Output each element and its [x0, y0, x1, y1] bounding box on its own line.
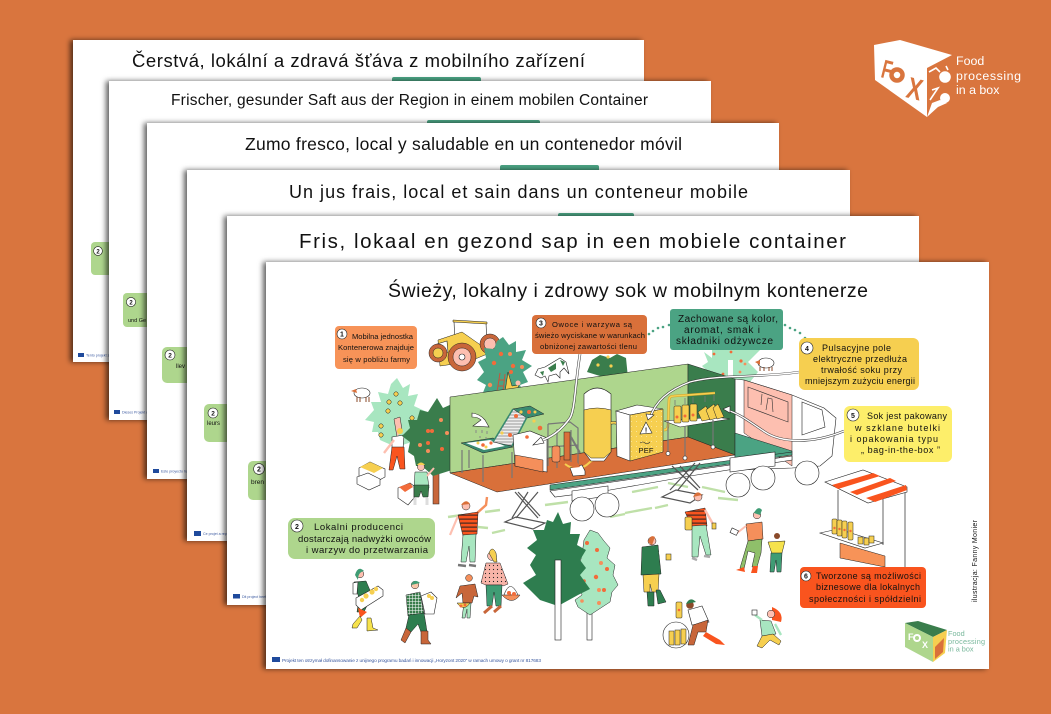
person: running woman [752, 607, 782, 648]
logo: Food processing in a box (bottom right) [905, 621, 985, 662]
illustrator credit: ilustracja: Fanny Monier [972, 519, 979, 602]
person: man with teal vest [641, 536, 671, 606]
icon: mint apple tree with picker [365, 378, 427, 470]
callout 4: Pulsacyjne pole [822, 343, 891, 353]
heading: German title: Frischer, gesunder Saft aus der Region in einem mobilen Container [171, 92, 648, 109]
person: child with basket [456, 575, 478, 618]
heading: Dutch title: Fris, lokaal en gezond sap in een mobiele container [299, 230, 846, 253]
icon: dark green apple tree [402, 398, 452, 504]
panel: Dutch sheet [227, 216, 919, 605]
panel: Spanish sheet: Este proyecto ha [161, 470, 188, 474]
container side wall [688, 364, 735, 455]
icon: juice tank [584, 388, 624, 461]
person: man in checked shirt [401, 581, 437, 644]
callout 5 [844, 406, 952, 462]
callout 2 [288, 518, 435, 559]
callout 2: dostarczają nadwyżki owoców [298, 534, 431, 545]
icon: tractor [429, 320, 500, 371]
logo: Food processing in a box (bottom right): in a box [948, 644, 974, 654]
callout 1: 1 [340, 332, 344, 338]
callout 5: 5 [851, 413, 855, 420]
icon: sheep left [351, 388, 370, 402]
icon: picker in green [414, 462, 434, 505]
logo: Food processing in a box (bottom right): F [908, 632, 914, 642]
icon: truck cab and body [735, 379, 836, 470]
icon: dark foreground tree [523, 512, 590, 640]
panel: German sheet: und Ge [128, 318, 146, 324]
logo: Food processing in a box (top right): processing [956, 69, 1021, 83]
logo: Food processing in a box (bottom right): processing [948, 637, 985, 646]
panel: Dutch sheet: 2 [257, 466, 261, 474]
logo: Food processing in a box (bottom right): X [922, 640, 928, 650]
callout 4: 4 [805, 346, 809, 353]
panel: Dutch sheet: Dit project heeft [242, 595, 267, 599]
person: woman with crate [352, 569, 383, 631]
arrow: step 4 to PEF unit [646, 372, 799, 420]
callout: preserved qualities: Zachowane są kolor, [678, 314, 778, 325]
panel: Polish sheet (front) [266, 262, 989, 669]
callout: preserved qualities: składniki odżywcze [676, 336, 773, 347]
callout 1 [335, 326, 417, 369]
callout 4 [799, 338, 919, 390]
panel: Spanish sheet: llev [176, 364, 185, 370]
arrow: step 3 pipe [533, 354, 580, 445]
panel: Czech sheet: 2 [96, 250, 100, 256]
person: woman with basket [481, 549, 520, 613]
panel: German sheet: 2 [129, 300, 133, 306]
icon: mint foreground tree [575, 530, 618, 640]
callout 3 [532, 315, 647, 354]
panel: Czech sheet [73, 40, 644, 362]
logo: Food processing in a box (top right): Food [956, 54, 984, 68]
heading: Spanish title: Zumo fresco, local y saludable en un contenedor móvil [245, 134, 682, 154]
panel: French sheet: leurs [207, 421, 220, 427]
person: woman with child [730, 508, 785, 573]
panel: French sheet: 2 [211, 410, 215, 418]
heading: Polish title: Świeży, lokalny i zdrowy sok w mobilnym kontenerze [388, 278, 868, 302]
callout 2: Lokalni producenci [314, 522, 403, 533]
truck floor [735, 433, 792, 462]
heading: Czech title: Čerstvá, lokální a zdravá šťáva z mobilního zařízení [132, 50, 586, 71]
dotted connectors [648, 324, 806, 339]
person: crouching man with bag-in-box [663, 599, 725, 648]
icon: bottling station [664, 393, 730, 460]
callout 6: 6 [804, 574, 808, 580]
container floor [450, 437, 792, 492]
road markings [448, 483, 738, 533]
callout 3: obniżonej zawartości tlenu [540, 342, 637, 351]
scissor lift left [505, 492, 545, 529]
person: man with striped shirt and bottle [685, 492, 716, 560]
callout 3: świeżo wyciskane w warunkach [535, 331, 645, 340]
callout 4: mniejszym zużyciu energii [805, 376, 915, 386]
icon: market stall [820, 470, 907, 567]
icon: PEF unit [616, 405, 663, 461]
person: waving man [450, 497, 487, 566]
logo: Food processing in a box (top right) [874, 40, 1021, 117]
callout: preserved qualities [670, 309, 783, 350]
icon: PEF unit: ! [645, 428, 647, 434]
panel: French sheet: Ce projet a reçu [203, 532, 229, 536]
icon: sorting table and conveyor [461, 406, 544, 482]
panel: German sheet: Dieses Projekt wurde [122, 410, 156, 414]
panel: Czech sheet: Tento projekt získal [86, 354, 117, 358]
callout 5: „ bag-in-the-box ” [861, 445, 940, 455]
logo: Food processing in a box (top right): in a box [956, 83, 1000, 97]
panel: Spanish sheet [147, 123, 779, 479]
callout 3: Owoce i warzywa są [552, 320, 633, 329]
truck chassis and wheels [550, 452, 819, 521]
panel: Spanish sheet: 2 [168, 352, 172, 360]
callout 4: elektryczne przedłuża [813, 354, 907, 364]
logo: Food processing in a box (top right): X [903, 72, 926, 107]
heading: French title: Un jus frais, local et sain dans un conteneur mobile [289, 182, 748, 202]
panel: French sheet [187, 170, 850, 541]
panel: Dutch sheet: bren [251, 479, 264, 486]
icon: crates of apples [357, 462, 414, 505]
footer: EU funding note: Projekt ten otrzymał dofinansowanie z unijnego programu badań i innowacji „Horyzont 2020” w ramach umowy o grant nr 817683 [282, 658, 541, 664]
callout 2: 2 [295, 524, 299, 531]
callout 4: trwałość soku przy [821, 365, 902, 375]
callout 5: w szklane butelki [854, 423, 940, 433]
callout 1: się w pobliżu farmy [343, 355, 410, 364]
container back wall [450, 364, 688, 473]
callout 1: Mobilna jednostka [352, 332, 414, 341]
callout: preserved qualities: aromat, smak i [684, 325, 760, 336]
icon: PEF unit: PEF [638, 446, 654, 455]
logo: Food processing in a box (top right): F [879, 54, 896, 85]
arrow: step 5 to bottles [723, 406, 844, 441]
icon: sheep right [755, 358, 774, 371]
callout 5: i opakowania typu [850, 434, 938, 444]
panel: German sheet [109, 81, 711, 420]
callout 5: Sok jest pakowany [867, 411, 948, 421]
callout 1: Kontenerowa znajduje [338, 343, 414, 352]
icon: juice press [548, 422, 598, 476]
scissor lift right [662, 463, 702, 503]
icon: cow [535, 358, 569, 382]
callout 6: Tworzone są możliwości [816, 571, 921, 581]
footer: EU funding note [272, 657, 541, 664]
callout 2: i warzyw do przetwarzania [306, 545, 429, 556]
icon: fruit bin [513, 431, 547, 472]
callout 3: 3 [539, 320, 543, 328]
callout 6: biznesowe dla lokalnych [816, 582, 920, 592]
callout 6 [800, 567, 926, 608]
callout 6: społeczności i spółdzielni [809, 594, 921, 604]
icon: background trees [477, 337, 760, 395]
logo: Food processing in a box (bottom right): Food [948, 629, 965, 638]
